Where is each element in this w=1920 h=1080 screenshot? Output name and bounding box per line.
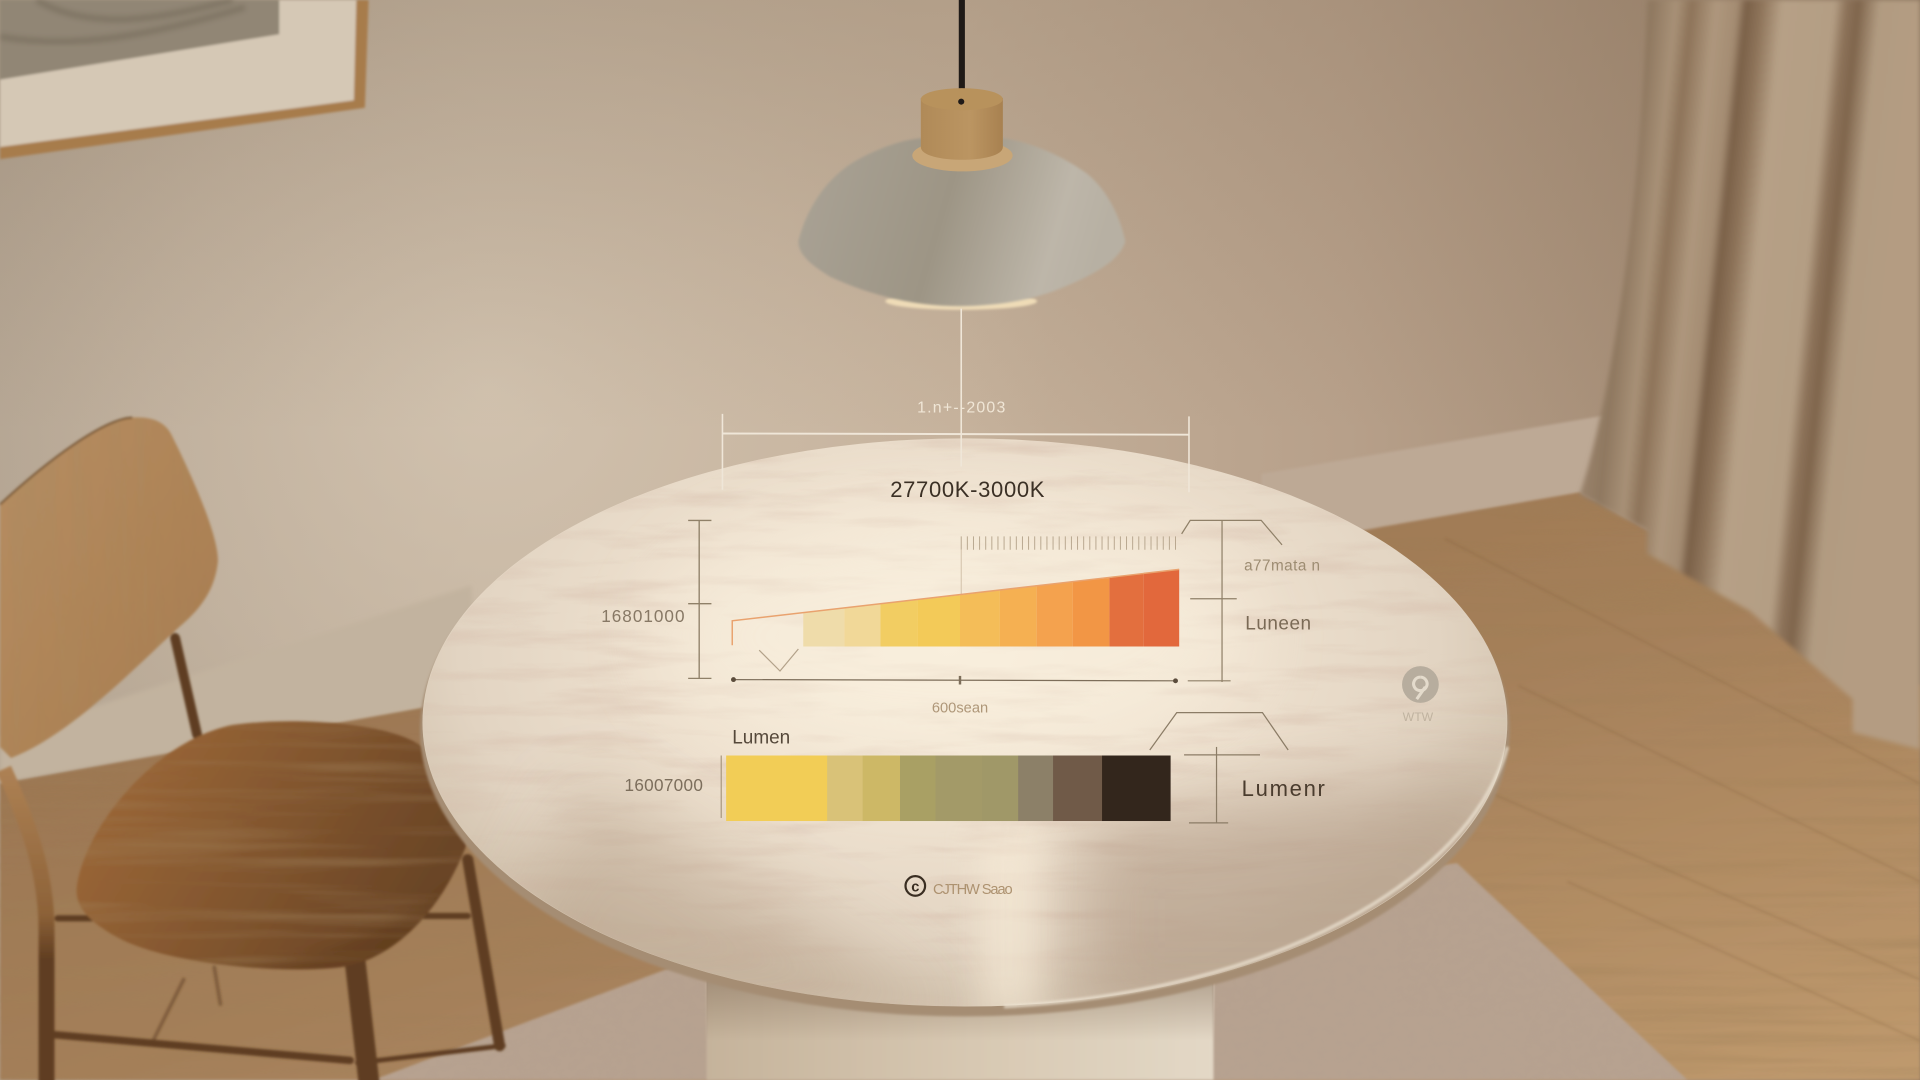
chair seat (76, 719, 467, 971)
icon: location badge (1402, 666, 1439, 724)
left axis (688, 520, 711, 678)
bottom axis (732, 676, 1177, 684)
table pedestal (707, 955, 1213, 1080)
heading: colour temperature: 27700K-3000K (890, 477, 1045, 502)
lamp glow (885, 293, 1037, 310)
chart: lumen wedge scale (601, 520, 1320, 717)
room background: wooden floor (0, 490, 1920, 1080)
label: beam range: 1.n+--2003 (917, 400, 1005, 417)
copyright mark (906, 876, 1013, 898)
badge label: WTW (1403, 710, 1434, 724)
right bracket (1182, 520, 1282, 682)
right bracket with trapezoid (1150, 713, 1288, 823)
chair legs (4, 638, 503, 1080)
bottom axis label: 600sean (932, 701, 988, 717)
baseboard left (0, 585, 478, 784)
swatch heading: Lumen (732, 727, 790, 748)
ruler ticks (961, 536, 1176, 550)
copyright mark: c (911, 879, 919, 895)
chair (0, 410, 503, 1080)
lamp cord (959, 0, 965, 103)
chart: colour swatch bar (624, 713, 1325, 823)
right small label: a77mata n (1244, 558, 1320, 575)
swatch left value: 16007000 (624, 775, 703, 795)
left value label: 16801000 (601, 606, 684, 626)
pendant lamp (798, 0, 1125, 310)
swatch right label: Lumenr (1242, 776, 1325, 801)
right lumen label: Luneen (1245, 613, 1312, 634)
rug (367, 857, 1690, 1080)
table top (422, 438, 1507, 1007)
lamp collar (912, 140, 1013, 171)
curtains (1580, 0, 1920, 749)
chair back (0, 410, 220, 765)
baseboard right (1261, 411, 1629, 551)
dimension bracket: beam width (722, 309, 1189, 492)
beam axis line (960, 309, 962, 467)
swatch segments (726, 756, 1171, 821)
framed picture (0, 0, 369, 159)
marble veins and light pool (450, 440, 1504, 1006)
lamp shade (798, 138, 1125, 306)
copyright text: CJTHW Saao (933, 882, 1013, 898)
wedge segments (803, 569, 1179, 647)
marble table (416, 429, 1531, 1029)
table rim (420, 443, 1510, 1016)
